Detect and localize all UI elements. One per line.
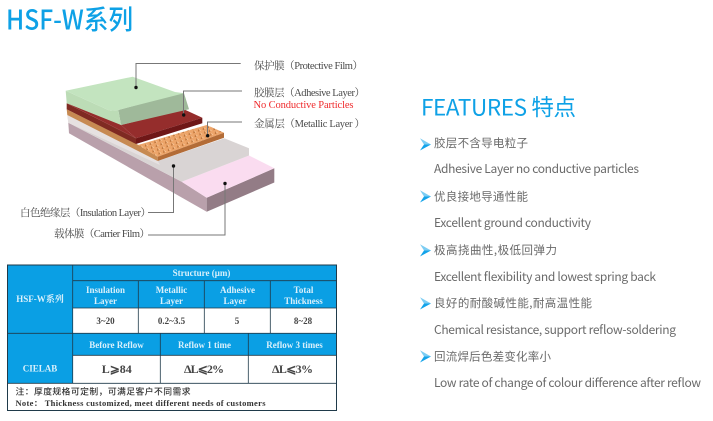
feature 1 — [420, 135, 639, 177]
carrier film layer — [68, 123, 274, 212]
table values: 8~28 — [294, 316, 313, 326]
feature 5: 回流焊后色差变化率小 — [434, 348, 552, 364]
table text — [16, 268, 323, 374]
arrow icon — [420, 244, 431, 256]
feature 4 — [420, 295, 676, 338]
arrow icon — [420, 190, 431, 202]
table values: 5 — [235, 316, 240, 326]
reflow values: ΔL⩽2% — [184, 362, 224, 376]
label: carrier film: 载体膜（Carrier Film） — [54, 227, 150, 240]
table rules — [8, 265, 337, 410]
table text: Insulation — [86, 285, 125, 295]
table text: Metallic — [156, 285, 187, 295]
table text: Reflow 1 time — [178, 340, 231, 350]
table text: Thickness — [284, 296, 323, 306]
features heading: FEATURES 特点 — [421, 90, 576, 122]
table note: 注：厚度规格可定制，可满足客户不同需求 — [16, 384, 191, 398]
label: metallic layer: 金属层（Metallic Layer ） — [254, 117, 365, 130]
features panel — [420, 90, 701, 391]
label: adhesive layer: 胶膜层（Adhesive Layer） — [254, 86, 365, 99]
feature 2: Excellent ground conductivity — [434, 214, 592, 231]
protective film layer — [66, 77, 189, 125]
feature 2 — [420, 188, 592, 231]
arrow icon — [420, 350, 431, 362]
reflow values — [102, 362, 313, 376]
table values — [96, 316, 313, 326]
arrow icon — [420, 297, 431, 310]
table note: Note： Thickness customized, meet different needs of customers — [16, 398, 266, 408]
metallic layer — [67, 109, 224, 161]
table text: Before Reflow — [89, 340, 144, 350]
table text: Reflow 3 times — [266, 340, 323, 350]
table text: HSF-W系列 — [16, 293, 64, 304]
table text: Total — [294, 285, 314, 295]
feature 5 — [420, 348, 701, 391]
label: insulation layer: 白色绝缘层（Insulation Layer） — [20, 206, 151, 219]
table note — [16, 384, 266, 408]
table text: CIELAB — [23, 364, 57, 374]
feature 4: 良好的耐酸碱性能,耐高温性能 — [434, 295, 592, 311]
reflow values: ΔL⩽3% — [272, 362, 313, 376]
feature 1: 胶层不含导电粒子 — [434, 135, 528, 151]
table blue header cells — [8, 265, 337, 383]
feature 4: Chemical resistance, support reflow-soldering — [434, 321, 676, 338]
feature 2: 优良接地导通性能 — [434, 188, 528, 204]
layer structure diagram — [66, 64, 274, 235]
arrow icon — [420, 138, 431, 150]
diagram labels — [20, 59, 365, 240]
table text: Layer — [160, 296, 183, 306]
specification table — [8, 265, 337, 410]
feature 5: Low rate of change of colour difference after reflow — [434, 374, 701, 391]
feature 3: Excellent flexibility and lowest spring back — [434, 268, 656, 285]
label: protective film: 保护膜（Protective Film） — [254, 59, 363, 72]
feature 1: Adhesive Layer no conductive particles — [434, 160, 639, 177]
label: no conductive particles: No Conductive Particles — [254, 100, 354, 111]
feature 3: 极高挠曲性,极低回弹力 — [434, 242, 557, 258]
table values: 3~20 — [96, 316, 115, 326]
table text: Layer — [94, 296, 117, 306]
table values: 0.2~3.5 — [158, 316, 186, 326]
adhesive layer — [67, 103, 202, 144]
leader dots — [134, 86, 227, 185]
insulation layer — [67, 115, 249, 182]
leader lines — [136, 64, 242, 235]
reflow values: L⩾84 — [102, 362, 132, 376]
table text: Layer — [224, 296, 246, 306]
table text: Structure (μm) — [173, 268, 230, 278]
table text: Adhesive — [220, 285, 255, 295]
feature 3 — [420, 242, 656, 285]
